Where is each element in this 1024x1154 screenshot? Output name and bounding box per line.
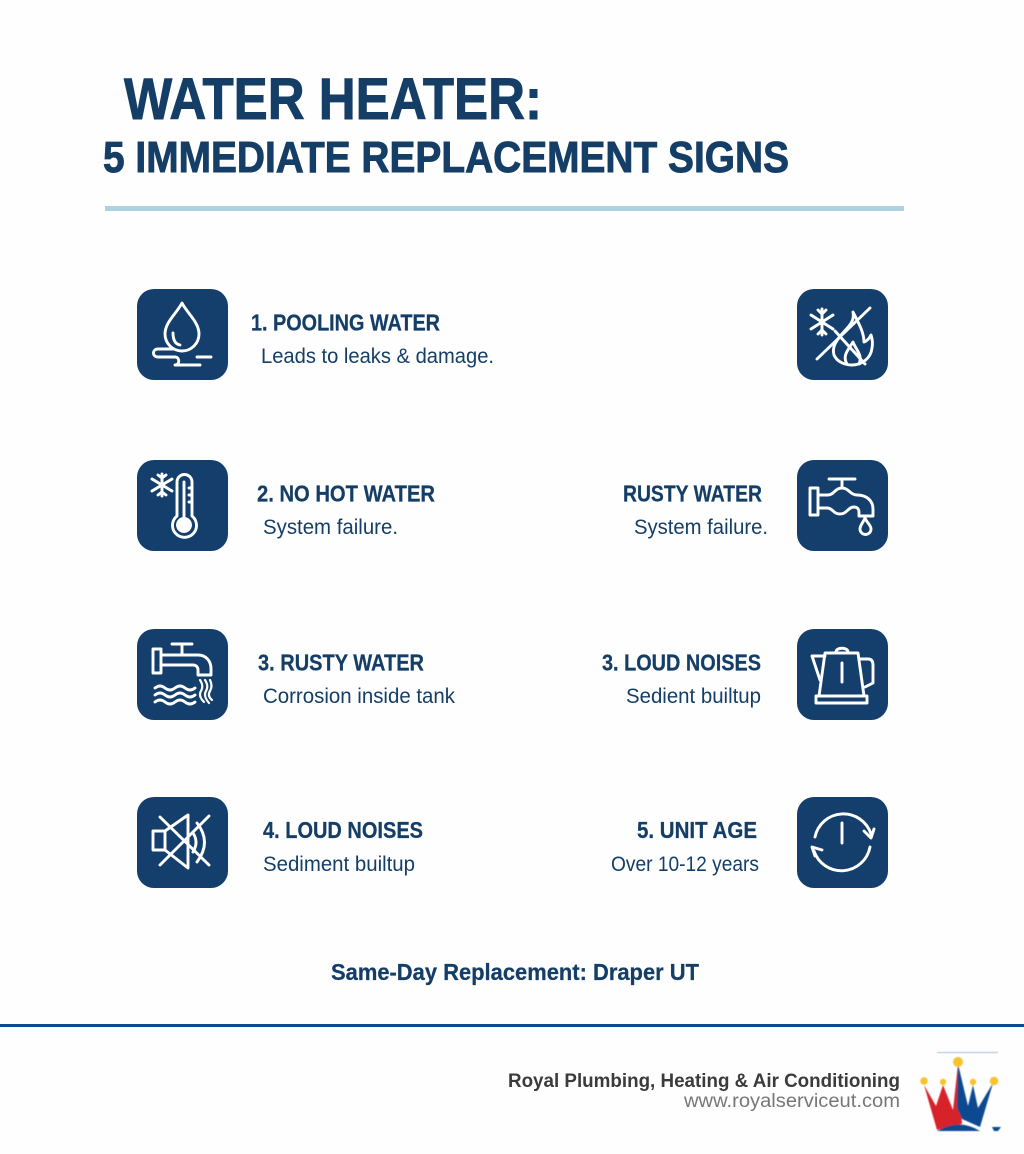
text: loud noises right: Sedient builtup (626, 685, 761, 708)
title (103, 67, 789, 182)
call to action: Same-Day Replacement: Draper UT (331, 959, 700, 985)
text: rusty water left: Corrosion inside tank (263, 685, 455, 708)
icon: snowflake and thermometer (137, 460, 228, 551)
icon: clock with cycle arrows (797, 797, 888, 888)
text: loud noises right (602, 650, 761, 708)
text: loud noises left: 4. LOUD NOISES (263, 817, 423, 843)
footer company text (508, 1071, 900, 1112)
logo: crown (920, 1052, 1001, 1131)
text: no hot water: 2. NO HOT WATER (257, 480, 435, 506)
icon: water drop and puddle (137, 289, 228, 380)
icon: faucet over waves (137, 629, 228, 720)
icon: muted speaker (137, 797, 228, 888)
sign: loud noises right (602, 629, 888, 720)
text: unit age (611, 817, 759, 876)
text: unit age: 5. UNIT AGE (637, 817, 757, 843)
icon: kettle (797, 629, 888, 720)
sign: unit age (611, 797, 888, 888)
sign: pooling water (137, 289, 494, 380)
icon: dripping faucet (797, 460, 888, 551)
title: 5 IMMEDIATE REPLACEMENT SIGNS (103, 133, 789, 182)
text: rusty water right (623, 480, 768, 539)
text: no hot water: System failure. (263, 516, 398, 539)
text: pooling water (251, 310, 494, 368)
text: pooling water: 1. POOLING WATER (251, 310, 440, 336)
text: unit age: Over 10-12 years (611, 853, 759, 876)
text: rusty water left: 3. RUSTY WATER (258, 650, 424, 676)
sign: rusty water left (137, 629, 455, 720)
footer company text: Royal Plumbing, Heating & Air Conditioning (508, 1071, 900, 1092)
sign: loud noises left (137, 797, 423, 888)
text: no hot water (257, 480, 435, 539)
text: loud noises left (263, 817, 423, 876)
sign: rusty water right (623, 460, 888, 551)
sign: no hot water (137, 460, 435, 551)
text: loud noises left: Sediment builtup (263, 853, 415, 876)
title: WATER HEATER: (124, 67, 542, 132)
text: rusty water right: System failure. (634, 516, 768, 539)
text: rusty water left (258, 650, 455, 708)
icon: snowflake and crossed flame (797, 289, 888, 380)
text: loud noises right: 3. LOUD NOISES (602, 650, 761, 676)
text: rusty water right: RUSTY WATER (623, 480, 762, 506)
text: pooling water: Leads to leaks & damage. (261, 345, 494, 368)
footer company text: www.royalserviceut.com (683, 1091, 900, 1112)
